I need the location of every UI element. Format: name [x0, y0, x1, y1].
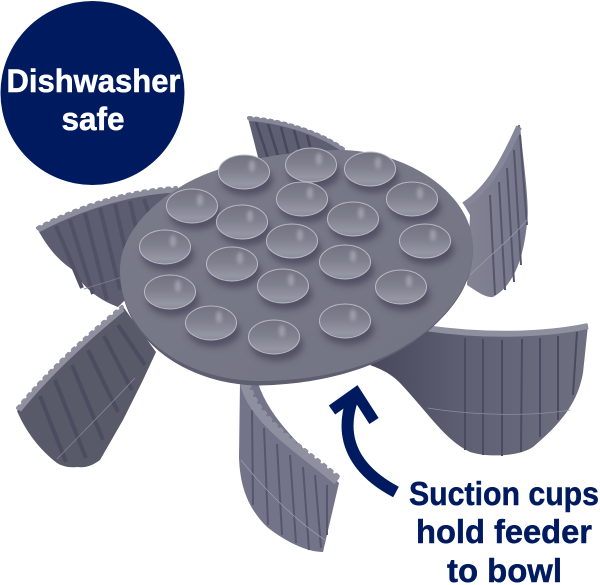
callout: suction cups text: hold feeder [416, 513, 592, 550]
suction cups [140, 148, 454, 361]
badge: Dishwasher safe [0, 1, 184, 185]
petal: bottom [239, 382, 340, 552]
suction disc [120, 150, 473, 386]
badge: Dishwasher safe: safe [62, 101, 124, 137]
petal: lower right [370, 325, 588, 456]
badge: Dishwasher safe: Dishwasher [6, 63, 180, 99]
arrow pointing to suction cups [332, 393, 396, 492]
petal: left [38, 188, 180, 307]
feeder product illustration [17, 118, 588, 552]
petal: back top [248, 118, 345, 165]
callout: suction cups text [409, 475, 599, 585]
petal: upper right [463, 125, 528, 297]
petal: lower left [17, 307, 156, 467]
